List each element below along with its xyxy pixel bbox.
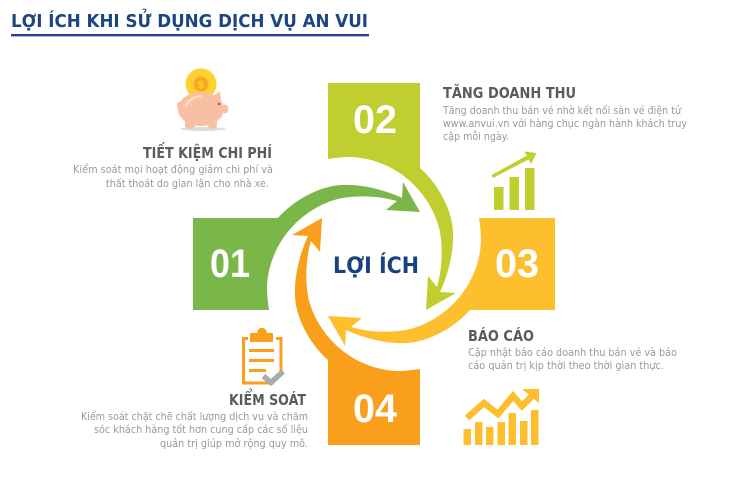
number 02: 02	[353, 98, 397, 142]
panel: tăng doanh thu text: TĂNG DOANH THU	[443, 83, 576, 102]
panel: 04 orange block with arrow	[292, 218, 420, 445]
panel: 01 green block with arrow	[193, 182, 420, 310]
panel: kiểm soát text: sóc khách hàng tốt hơn cung cấp các số liệu	[94, 424, 308, 436]
panel: tăng doanh thu text: cập mỗi ngày.	[443, 130, 509, 143]
panel: tăng doanh thu text	[442, 83, 687, 143]
number 03: 03	[495, 242, 539, 286]
icon: bar chart with zigzag arrow	[464, 389, 539, 445]
panel: báo cáo text: cáo quản trị kịp thời theo thời gian thực.	[468, 360, 664, 372]
panel: tiết kiệm chi phí text: thất thoát do gian lận cho nhà xe.	[106, 178, 269, 190]
icon: rising bars with arrow	[492, 152, 536, 210]
icon: clipboard with check	[244, 328, 283, 383]
panel: 03 yellow block with arrow	[328, 218, 555, 346]
panel: kiểm soát text	[81, 387, 308, 450]
panel: báo cáo text	[468, 326, 677, 372]
panel: báo cáo text: BÁO CÁO	[468, 326, 534, 345]
number 04: 04	[353, 387, 398, 431]
panel: tiết kiệm chi phí text: TIẾT KIỆM CHI PHÍ	[143, 141, 272, 162]
panel: báo cáo text: Cập nhật báo cáo doanh thu bán vé và báo	[468, 347, 677, 359]
title: LỢI ÍCH KHI SỬ DỤNG DỊCH VỤ AN VUI	[11, 8, 368, 32]
panel: tiết kiệm chi phí text	[73, 141, 273, 190]
panel: tăng doanh thu text: www.anvui.vn với hàng chục ngàn hành khách truy	[443, 118, 687, 130]
panel: tiết kiệm chi phí text: Kiểm soát mọi hoạt động giảm chi phí và	[73, 163, 273, 176]
icon: piggy bank	[177, 68, 228, 131]
panel: kiểm soát text: KIỂM SOÁT	[229, 387, 306, 409]
panel: kiểm soát text: Kiểm soát chặt chẽ chất lượng dịch vụ và chăm	[81, 410, 308, 423]
panel: 02 lime block with arrow	[328, 83, 456, 310]
center label: LỢI ÍCH	[333, 253, 419, 279]
panel: kiểm soát text: quản trị giúp mở rộng quy mô.	[160, 438, 308, 450]
icon: piggy bank: $	[198, 80, 205, 91]
panel: tăng doanh thu text: Tăng doanh thu bán vé nhờ kết nối sàn vé điện tử	[442, 105, 682, 117]
number 01: 01	[210, 242, 250, 286]
